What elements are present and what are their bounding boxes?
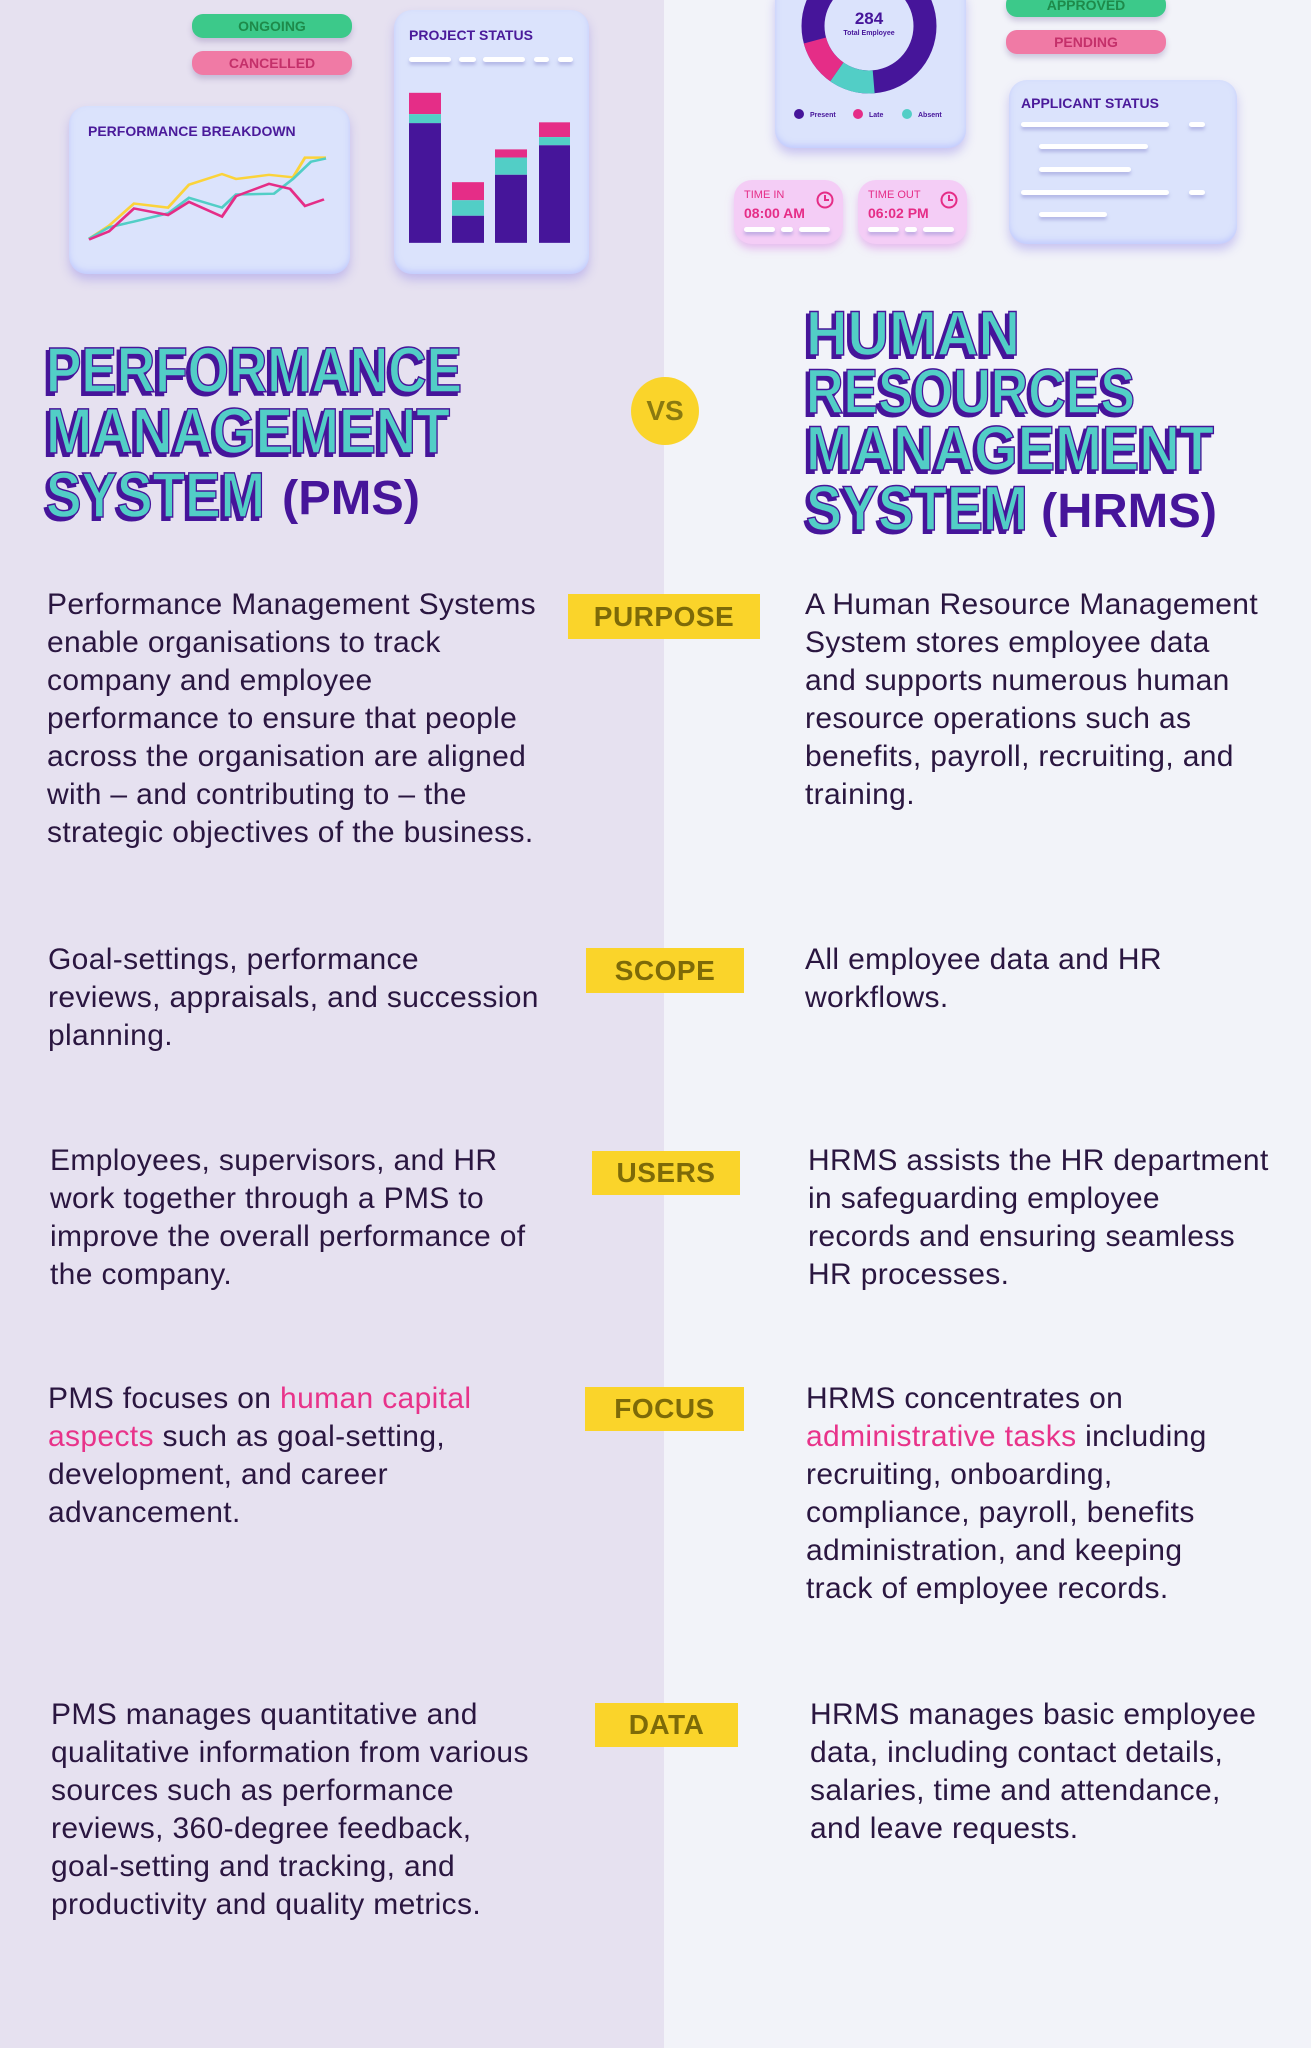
donut chart: Late <box>869 112 884 119</box>
row: purpose left text: with – and contributing to – the <box>47 778 467 811</box>
row: data left text: sources such as performance <box>51 1774 454 1807</box>
label: purpose <box>568 594 760 639</box>
title: PMS: SYSTEM <box>46 459 265 531</box>
card: time out <box>858 180 967 244</box>
line chart <box>88 156 326 241</box>
title: HRMS: SYSTEM <box>806 474 1028 544</box>
label: data: DATA <box>629 1709 704 1740</box>
chart title: PROJECT STATUS <box>409 27 533 43</box>
row: purpose left text: across the organisation are aligned <box>47 740 526 773</box>
title: PMS: PERFORMANCE <box>43 337 459 409</box>
row: users left text: Employees, supervisors, and HR <box>50 1144 497 1177</box>
title: HRMS: MANAGEMENT <box>806 414 1214 484</box>
row: data left text: reviews, 360-degree feedback, <box>51 1812 471 1845</box>
label: focus <box>585 1387 744 1431</box>
title: HRMS: RESOURCES <box>803 360 1132 430</box>
row: users right text: HRMS assists the HR department <box>808 1144 1269 1177</box>
row: purpose left text: Performance Management Systems <box>47 588 536 621</box>
row: users left text: work together through a PMS to <box>50 1182 484 1215</box>
card: project status bar chart <box>394 10 589 274</box>
row: purpose left text: enable organisations to track <box>47 626 441 659</box>
label: users: USERS <box>617 1157 715 1188</box>
label: purpose: PURPOSE <box>594 600 734 632</box>
card title: APPLICANT STATUS <box>1021 95 1159 111</box>
icon: clock <box>940 192 958 208</box>
row: purpose right text: benefits, payroll, recruiting, and <box>805 740 1234 773</box>
row: focus right text: HRMS concentrates on <box>806 1382 1123 1415</box>
label: focus: FOCUS <box>614 1393 715 1424</box>
label: scope <box>586 948 744 993</box>
title: HRMS: HUMAN <box>803 302 1017 372</box>
card: total employee donut <box>775 0 966 148</box>
row: data right text: and leave requests. <box>810 1812 1078 1845</box>
row: data right text: HRMS manages basic employee <box>810 1698 1256 1731</box>
row: data left text: PMS manages quantitative and <box>51 1698 478 1731</box>
row: focus left text: aspects such as goal-setting, <box>48 1420 445 1453</box>
vs badge <box>631 377 699 445</box>
row: focus right text: administration, and keeping <box>806 1534 1182 1567</box>
row: purpose left text: performance to ensure that people <box>47 702 517 735</box>
row: scope left text: Goal-settings, performance <box>48 943 419 976</box>
row: users right text: in safeguarding employee <box>808 1182 1160 1215</box>
row: focus left text: PMS focuses on human capital <box>48 1382 471 1415</box>
label: scope: SCOPE <box>615 954 715 986</box>
row: focus right text: administrative tasks including <box>806 1420 1207 1453</box>
donut chart: Absent <box>918 112 942 119</box>
card: time in: 08:00 AM <box>744 205 805 221</box>
row: scope left text: reviews, appraisals, and succession <box>48 981 539 1014</box>
title: HRMS <box>803 299 1217 547</box>
row: users right text <box>808 1144 1269 1291</box>
row: data left text: qualitative information from various <box>51 1736 529 1769</box>
row: purpose right text: System stores employee data <box>805 626 1210 659</box>
row: focus right text: recruiting, onboarding, <box>806 1458 1113 1491</box>
row: scope right text <box>805 943 1162 1014</box>
card: time out: 06:02 PM <box>868 205 929 221</box>
row: users left text: the company. <box>50 1258 232 1291</box>
title: PMS: SYSTEM <box>43 462 262 534</box>
row: purpose right text <box>805 588 1258 811</box>
row: data right text: salaries, time and attendance, <box>810 1774 1221 1807</box>
label: data <box>595 1703 738 1747</box>
row: scope right text: workflows. <box>805 981 949 1014</box>
row: purpose right text: and supports numerous human <box>805 664 1230 697</box>
row: data right text <box>810 1698 1256 1845</box>
row: scope left text: planning. <box>48 1019 173 1052</box>
row: focus right text: track of employee records. <box>806 1572 1169 1605</box>
row: focus right text: compliance, payroll, benefits <box>806 1496 1195 1529</box>
pill: cancelled <box>192 51 352 75</box>
card: time out: TIME OUT <box>868 189 921 201</box>
title: HRMS: RESOURCES <box>806 357 1135 427</box>
row: users right text: records and ensuring seamless <box>808 1220 1235 1253</box>
chart title: PERFORMANCE BREAKDOWN <box>88 123 296 139</box>
donut chart: Present <box>810 112 836 119</box>
icon: clock <box>816 192 834 208</box>
pill: approved <box>1006 0 1166 17</box>
pill: pending <box>1006 30 1166 54</box>
row: focus left text: advancement. <box>48 1496 241 1529</box>
pill: pending: PENDING <box>1054 34 1118 50</box>
card: performance breakdown chart <box>69 106 350 274</box>
card: applicant status <box>1009 80 1237 244</box>
row: users right text: HR processes. <box>808 1258 1009 1291</box>
row: purpose left text: company and employee <box>47 664 373 697</box>
card: time in <box>734 180 843 244</box>
row: purpose right text: A Human Resource Management <box>805 588 1258 621</box>
donut chart: Total Employee <box>843 30 895 37</box>
title: PMS <box>43 334 462 534</box>
row: purpose left text: strategic objectives of the business. <box>47 816 534 849</box>
title: PMS: MANAGEMENT <box>46 395 450 467</box>
row: purpose right text: resource operations such as <box>805 702 1191 735</box>
row: users left text: improve the overall performance of <box>50 1220 525 1253</box>
donut chart <box>794 0 942 119</box>
label: users <box>592 1151 740 1195</box>
row: users left text <box>50 1144 526 1291</box>
pill: cancelled: CANCELLED <box>229 55 315 71</box>
vs badge: VS <box>646 395 684 426</box>
row: data left text: productivity and quality metrics. <box>51 1888 481 1921</box>
pill: ongoing: ONGOING <box>238 18 306 34</box>
title: HRMS: (HRMS) <box>1041 485 1217 538</box>
row: scope right text: All employee data and HR <box>805 943 1162 976</box>
pill: ongoing <box>192 14 352 38</box>
row: data left text: goal-setting and tracking, and <box>51 1850 455 1883</box>
left background panel <box>0 0 664 2048</box>
row: data right text: data, including contact details, <box>810 1736 1223 1769</box>
title: PMS: PERFORMANCE <box>46 334 462 406</box>
card: time in: TIME IN <box>744 189 784 201</box>
row: scope left text <box>48 943 539 1052</box>
row: focus left text <box>48 1382 471 1529</box>
row: focus left text: development, and career <box>48 1458 388 1491</box>
donut chart: 284 <box>855 9 884 28</box>
title: HRMS: HUMAN <box>806 299 1020 369</box>
title: HRMS: SYSTEM <box>803 477 1025 547</box>
row: focus right text <box>806 1382 1207 1605</box>
title: PMS: (PMS) <box>282 472 420 525</box>
stacked bars <box>409 92 570 243</box>
row: purpose left text <box>47 588 536 849</box>
row: purpose right text: training. <box>805 778 915 811</box>
title: HRMS: MANAGEMENT <box>803 417 1211 487</box>
title: PMS: MANAGEMENT <box>43 398 447 470</box>
row: data left text <box>51 1698 529 1921</box>
